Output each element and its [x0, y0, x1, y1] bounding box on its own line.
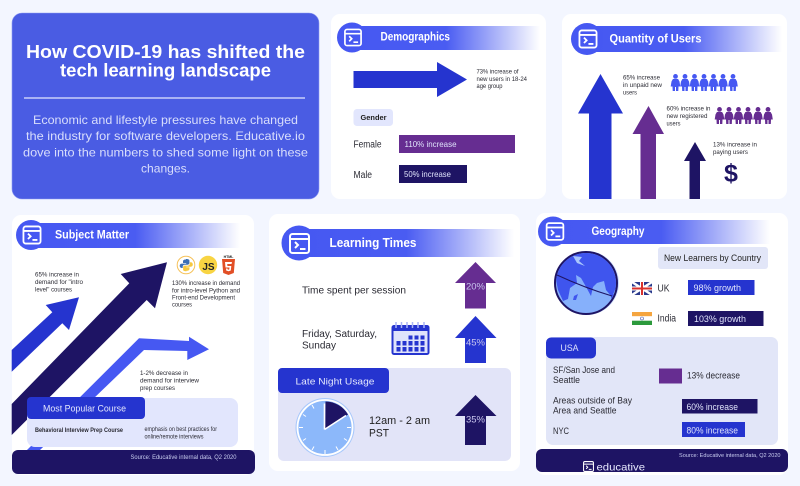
- text: registered users: new registered: [666, 114, 708, 120]
- heading: subject matter: Subject Matter: [55, 228, 129, 242]
- chip: new learners by country: [658, 247, 768, 269]
- text: unpaid users: 65% increase: [623, 76, 661, 82]
- text: python and front-end demand: for intro-level Python and: [172, 288, 240, 294]
- text: python and front-end demand: 130% increase in demand: [172, 281, 240, 287]
- text: unpaid users: [623, 76, 663, 96]
- arrow: python and front-end demand: [12, 262, 167, 435]
- text: friday saturday sunday: Friday, Saturday,: [302, 329, 377, 340]
- text: 18-24 age group: [476, 70, 528, 90]
- heading: quantity of users: [571, 23, 782, 55]
- icon: calendar: [392, 322, 430, 355]
- row: SF and Seattle: 13% decrease: [687, 370, 740, 380]
- icon: python: [177, 256, 195, 274]
- heading: learning times: Learning Times: [330, 236, 417, 250]
- bar: female: [354, 135, 515, 153]
- row: SF and Seattle: [553, 365, 740, 385]
- arrow: 35%: [455, 395, 496, 445]
- icon: html5: [222, 255, 235, 275]
- heading: quantity of users: Quantity of Users: [610, 32, 702, 46]
- heading: most popular course: Most Popular Course: [43, 404, 126, 414]
- row: SF and Seattle: Seattle: [553, 375, 580, 385]
- introduction text: dove into the numbers to shed some light on these: [23, 146, 308, 160]
- text: course description: [144, 427, 217, 440]
- bar: female: Female: [354, 140, 382, 150]
- arrow: 20%: [455, 262, 496, 308]
- text: interview prep courses: demand for interview: [140, 378, 200, 384]
- text: interview prep courses: 1-2% decrease in: [140, 371, 188, 377]
- text: friday saturday sunday: [302, 329, 377, 352]
- heading: demographics: Demographics: [380, 32, 450, 44]
- text: interview prep courses: [140, 371, 200, 392]
- row: UK: 98% growth: [694, 283, 741, 293]
- row: India: [632, 311, 764, 326]
- arrow: intro level courses: [12, 297, 79, 372]
- icon: clock: [296, 398, 354, 457]
- arrow: 45%: [455, 316, 496, 363]
- panel: demographics: [331, 14, 546, 199]
- introduction text: Economic and lifestyle pressures have changed: [33, 113, 298, 127]
- icon: dollar sign: $: [724, 160, 738, 188]
- icon: javascript: JS: [202, 262, 215, 273]
- text: 18-24 age group: age group: [476, 84, 503, 90]
- panel: subject matter: [12, 215, 255, 475]
- text: late night hours: PST: [369, 428, 389, 440]
- text: unpaid users: in unpaid new: [623, 83, 663, 89]
- introduction text: changes.: [141, 162, 190, 176]
- text: paying users: [713, 142, 757, 156]
- text: registered users: users: [666, 122, 680, 128]
- title: tech learning landscape: [60, 60, 271, 80]
- row: India: 103% growth: [694, 314, 746, 324]
- text: intro level courses: [35, 272, 84, 294]
- text: interview prep courses: prep courses: [140, 386, 175, 392]
- footer: subject matter source: Source: Educative internal data, Q2 2020: [130, 455, 237, 461]
- chip: gender: Gender: [360, 113, 387, 122]
- icons: registered users people: [715, 107, 773, 124]
- heading: most popular course: [27, 397, 145, 419]
- text: time spent per session: Time spent per session: [302, 286, 406, 296]
- row: outside Bay Area and Seattle: Area and Seattle: [553, 406, 616, 416]
- heading: subject matter: [16, 220, 240, 250]
- panel: quantity of users: [562, 14, 787, 199]
- text: unpaid users: users: [623, 90, 637, 96]
- text: intro level courses: 65% increase in: [35, 272, 79, 278]
- panel: learning times: [269, 214, 520, 471]
- text: friday saturday sunday: Sunday: [302, 340, 336, 352]
- text: registered users: 60% increase in: [666, 106, 710, 112]
- arrow: 35%: 35%: [466, 414, 486, 426]
- row: UK: [632, 280, 754, 295]
- heading: late night usage: Late Night Usage: [296, 376, 374, 388]
- row: SF and Seattle: SF/San Jose and: [553, 365, 615, 375]
- chip: gender: [354, 109, 393, 126]
- heading: geography: Geography: [592, 226, 645, 238]
- arrow: unpaid users: [578, 74, 623, 199]
- text: 18-24 age group: new users in 18-24: [476, 77, 528, 83]
- arrow: 18-24 age group: [354, 62, 467, 97]
- text: intro level courses: level" courses: [35, 288, 72, 294]
- panel: title and introduction: [12, 13, 319, 199]
- row: India: India: [658, 314, 676, 324]
- icons: unpaid users people: [671, 74, 738, 91]
- text: 18-24 age group: 73% increase of: [476, 70, 519, 76]
- introduction text: [23, 113, 308, 176]
- title: [26, 41, 305, 80]
- text: intro level courses: demand for "intro: [35, 280, 84, 286]
- bar: male: [354, 165, 467, 183]
- text: course description: online/remote interviews: [144, 434, 204, 440]
- introduction text: the industry for software developers. Educative.io: [26, 129, 305, 143]
- arrow: 45%: 45%: [466, 338, 486, 348]
- panel: geography: [536, 213, 788, 475]
- panel: USA: [546, 337, 778, 445]
- panel: most popular course: [27, 397, 238, 447]
- text: late night hours: [369, 415, 430, 440]
- text: late night hours: 12am - 2 am: [369, 415, 430, 427]
- text: python and front-end demand: courses: [172, 302, 192, 308]
- footer: geography source and logo: [536, 449, 788, 474]
- footer: geography source and logo: Source: Educative internal data, Q2 2020: [679, 453, 780, 459]
- heading: demographics: [337, 22, 540, 52]
- logo: educative: educative: [596, 462, 645, 474]
- text: registered users: [666, 106, 710, 128]
- bar: male: Male: [354, 170, 372, 181]
- heading: geography: [538, 216, 770, 246]
- arrow: 20%: 20%: [466, 282, 486, 292]
- text: python and front-end demand: [172, 281, 240, 308]
- text: course name: Behavioral Interview Prep Course: [35, 428, 124, 434]
- arrow: interview prep courses: [27, 337, 209, 450]
- row: NYC: [553, 422, 745, 437]
- heading: USA: USA: [560, 343, 578, 353]
- row: outside Bay Area and Seattle: 60% increase: [686, 402, 738, 412]
- text: python and front-end demand: Front-end Development: [172, 296, 235, 302]
- heading: late night usage: [278, 368, 389, 393]
- panel: late night usage: [278, 368, 511, 461]
- bar: male: 50% increase: [404, 169, 451, 179]
- row: NYC: 80% increase: [686, 426, 738, 436]
- icon: javascript: [199, 256, 217, 274]
- icon: html5: HTML: [224, 255, 234, 259]
- row: outside Bay Area and Seattle: Areas outside of Bay: [553, 396, 632, 406]
- title: How COVID-19 has shifted the: [26, 41, 305, 62]
- arrow: paying users: [684, 142, 706, 199]
- footer: subject matter source: [12, 450, 255, 474]
- text: paying users: 13% increase in: [713, 142, 757, 148]
- text: paying users: paying users: [713, 150, 748, 156]
- row: NYC: NYC: [553, 426, 569, 436]
- row: UK: UK: [658, 284, 670, 294]
- icon: UK flag: [632, 282, 652, 295]
- arrow: registered users: [632, 106, 664, 199]
- bar: female: 110% increase: [404, 139, 457, 149]
- icon: globe: [555, 245, 620, 315]
- heading: learning times: [282, 226, 514, 260]
- text: course description: emphasis on best practices for: [144, 427, 217, 433]
- heading: USA: [546, 338, 596, 358]
- row: outside Bay Area and Seattle: [553, 396, 758, 416]
- chip: new learners by country: New Learners by Country: [664, 253, 761, 263]
- icon: India flag: [632, 312, 652, 325]
